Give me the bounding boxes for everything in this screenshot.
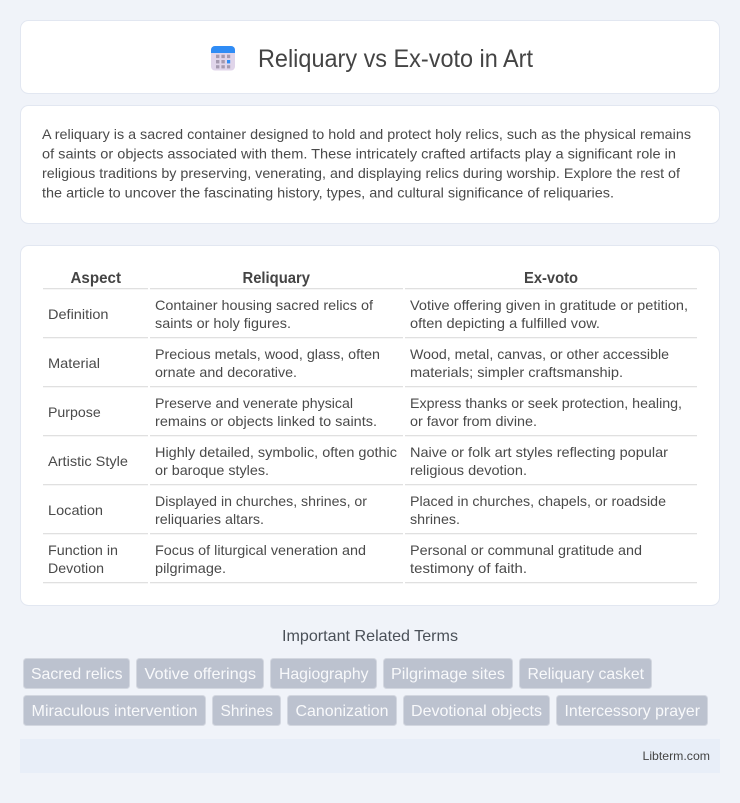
- row: Function in Devotion: Function in: [48, 542, 118, 558]
- table header row: Ex-voto: [524, 270, 578, 287]
- row: Material: Material: [48, 355, 100, 371]
- row: Function in Devotion: Devotion: [48, 560, 104, 576]
- intro paragraph: religious traditions by preserving, venerating, and displaying relics during worship. Explore the rest of: [42, 165, 680, 181]
- tag: Miraculous intervention: Miraculous intervention: [32, 703, 198, 720]
- row: Purpose: [43, 395, 697, 436]
- tag: Intercessory prayer: Intercessory prayer: [564, 703, 701, 720]
- row: Function in Devotion: Focus of liturgical veneration and: [155, 542, 366, 558]
- footer credit: Libterm.com: [642, 749, 710, 763]
- intro paragraph: the article to uncover the fascinating history, types, and cultural significance of reliquaries.: [42, 184, 614, 200]
- tag: Hagiography: [270, 658, 376, 688]
- row: Location: shrines.: [410, 511, 460, 527]
- row: Purpose: or favor from divine.: [410, 413, 537, 429]
- row: Purpose: Purpose: [48, 404, 101, 420]
- tag: Miraculous intervention: [24, 696, 206, 726]
- row: Artistic Style: religious devotion.: [410, 462, 527, 478]
- row: Artistic Style: Naive or folk art styles reflecting popular: [410, 444, 668, 460]
- heading: related terms: Important Related Terms: [282, 628, 458, 645]
- row: Material: [43, 346, 697, 387]
- row: Artistic Style: Highly detailed, symbolic, often gothic: [155, 444, 397, 460]
- tag: Intercessory prayer: [556, 696, 708, 726]
- tag: Shrines: Shrines: [220, 703, 273, 720]
- tag: Pilgrimage sites: Pilgrimage sites: [391, 666, 505, 683]
- row: Location: reliquaries altars.: [155, 511, 264, 527]
- row: Purpose: Express thanks or seek protection, healing,: [410, 395, 682, 411]
- row: Location: [43, 493, 697, 534]
- row: Material: ornate and decorative.: [155, 364, 297, 380]
- row: Artistic Style: Artistic Style: [48, 453, 128, 469]
- related term tags: [24, 658, 708, 726]
- tag: Reliquary casket: [520, 658, 652, 688]
- row: Definition: saints or holy figures.: [155, 315, 291, 331]
- tag: Canonization: Canonization: [296, 703, 388, 720]
- row: Definition: Definition: [48, 306, 108, 322]
- row: Purpose: Preserve and venerate physical: [155, 395, 353, 411]
- tag: Pilgrimage sites: [384, 658, 512, 688]
- table header row: Aspect: [70, 270, 122, 287]
- row: Purpose: remains or objects linked to saints.: [155, 413, 377, 429]
- panel: introduction: [20, 106, 720, 224]
- tag: Votive offerings: Votive offerings: [144, 666, 256, 683]
- table header row: Reliquary: [242, 270, 310, 287]
- tag: Devotional objects: Devotional objects: [411, 703, 542, 720]
- tag: Canonization: [288, 696, 396, 726]
- row: Material: materials; simpler craftsmanship.: [410, 364, 623, 380]
- row: Definition: Container housing sacred relics of: [155, 297, 373, 313]
- row: Artistic Style: [43, 444, 697, 485]
- intro paragraph: of saints or objects associated with them. These intricately crafted artifacts play a significant role in: [42, 146, 676, 162]
- row: Definition: often depicting a fulfilled vow.: [410, 315, 600, 331]
- row: Function in Devotion: Personal or communal gratitude and: [410, 542, 642, 558]
- row: Function in Devotion: testimony of faith.: [410, 560, 527, 576]
- panel: title header: [20, 20, 720, 94]
- tag: Hagiography: Hagiography: [279, 666, 368, 683]
- footer bar: [20, 739, 720, 773]
- row: Definition: [43, 297, 697, 338]
- tag: Sacred relics: Sacred relics: [31, 666, 122, 683]
- row: Location: Placed in churches, chapels, or roadside: [410, 493, 666, 509]
- icon: calendar: [211, 46, 235, 70]
- intro paragraph: A reliquary is a sacred container designed to hold and protect holy relics, such as the physical remains: [42, 126, 691, 142]
- intro paragraph: [42, 126, 691, 200]
- row: Location: Location: [48, 502, 103, 518]
- row: Definition: Votive offering given in gratitude or petition,: [410, 297, 688, 313]
- tag: Devotional objects: [404, 696, 550, 726]
- row: Artistic Style: or baroque styles.: [155, 462, 269, 478]
- title: Reliquary vs Ex-voto in Art: [258, 45, 533, 73]
- row: Material: Precious metals, wood, glass, often: [155, 346, 380, 362]
- row: Location: Displayed in churches, shrines, or: [155, 493, 367, 509]
- tag: Sacred relics: [24, 658, 130, 688]
- panel: comparison table: [20, 246, 720, 606]
- tag: Shrines: [212, 696, 280, 726]
- row: Function in Devotion: [43, 542, 697, 583]
- tag: Votive offerings: [136, 658, 264, 688]
- table header row: [43, 270, 697, 289]
- row: Function in Devotion: pilgrimage.: [155, 560, 226, 576]
- row: Material: Wood, metal, canvas, or other accessible: [410, 346, 669, 362]
- tag: Reliquary casket: Reliquary casket: [528, 666, 645, 683]
